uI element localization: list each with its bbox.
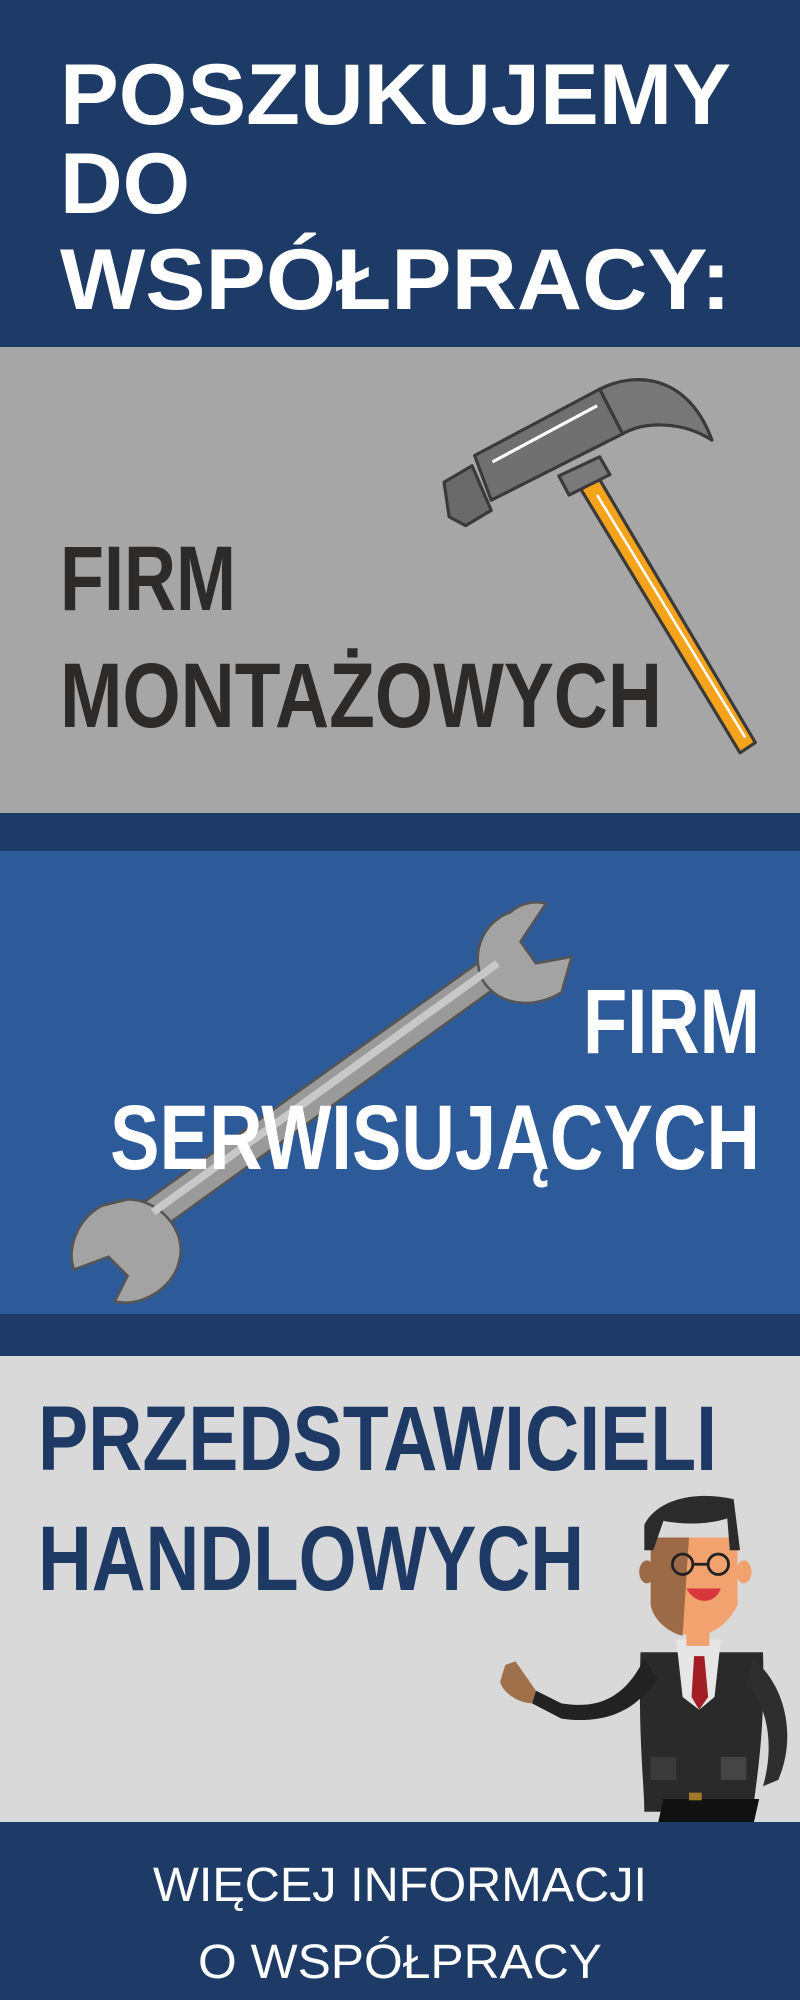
icon: wrench: [72, 902, 572, 1303]
panel: firm montazowych: [0, 347, 800, 813]
title: WSPÓŁPRACY:: [60, 232, 731, 328]
footer text: [153, 1859, 647, 1989]
heading: przedstawicieli handlowych: [38, 1388, 717, 1610]
title: [60, 47, 731, 328]
heading: przedstawicieli handlowych: HANDLOWYCH: [38, 1508, 584, 1610]
title: DO: [60, 136, 190, 232]
heading: firm montazowych: FIRM: [60, 528, 236, 630]
icon: hammer: [444, 380, 755, 753]
heading: firm montazowych: MONTAŻOWYCH: [60, 645, 662, 747]
footer text: WIĘCEJ INFORMACJI: [153, 1859, 647, 1912]
header panel: [0, 0, 800, 347]
heading: firm serwisujacych: [110, 971, 760, 1189]
icon: businessman: [500, 1496, 787, 1827]
heading: firm montazowych: [60, 528, 662, 747]
panel: firm serwisujacych: [0, 851, 800, 1314]
title: POSZUKUJEMY: [60, 47, 731, 143]
footer panel: [0, 1822, 800, 2000]
footer text: O WSPÓŁPRACY: [198, 1935, 602, 1989]
panel: przedstawicieli handlowych: [0, 1356, 800, 1827]
